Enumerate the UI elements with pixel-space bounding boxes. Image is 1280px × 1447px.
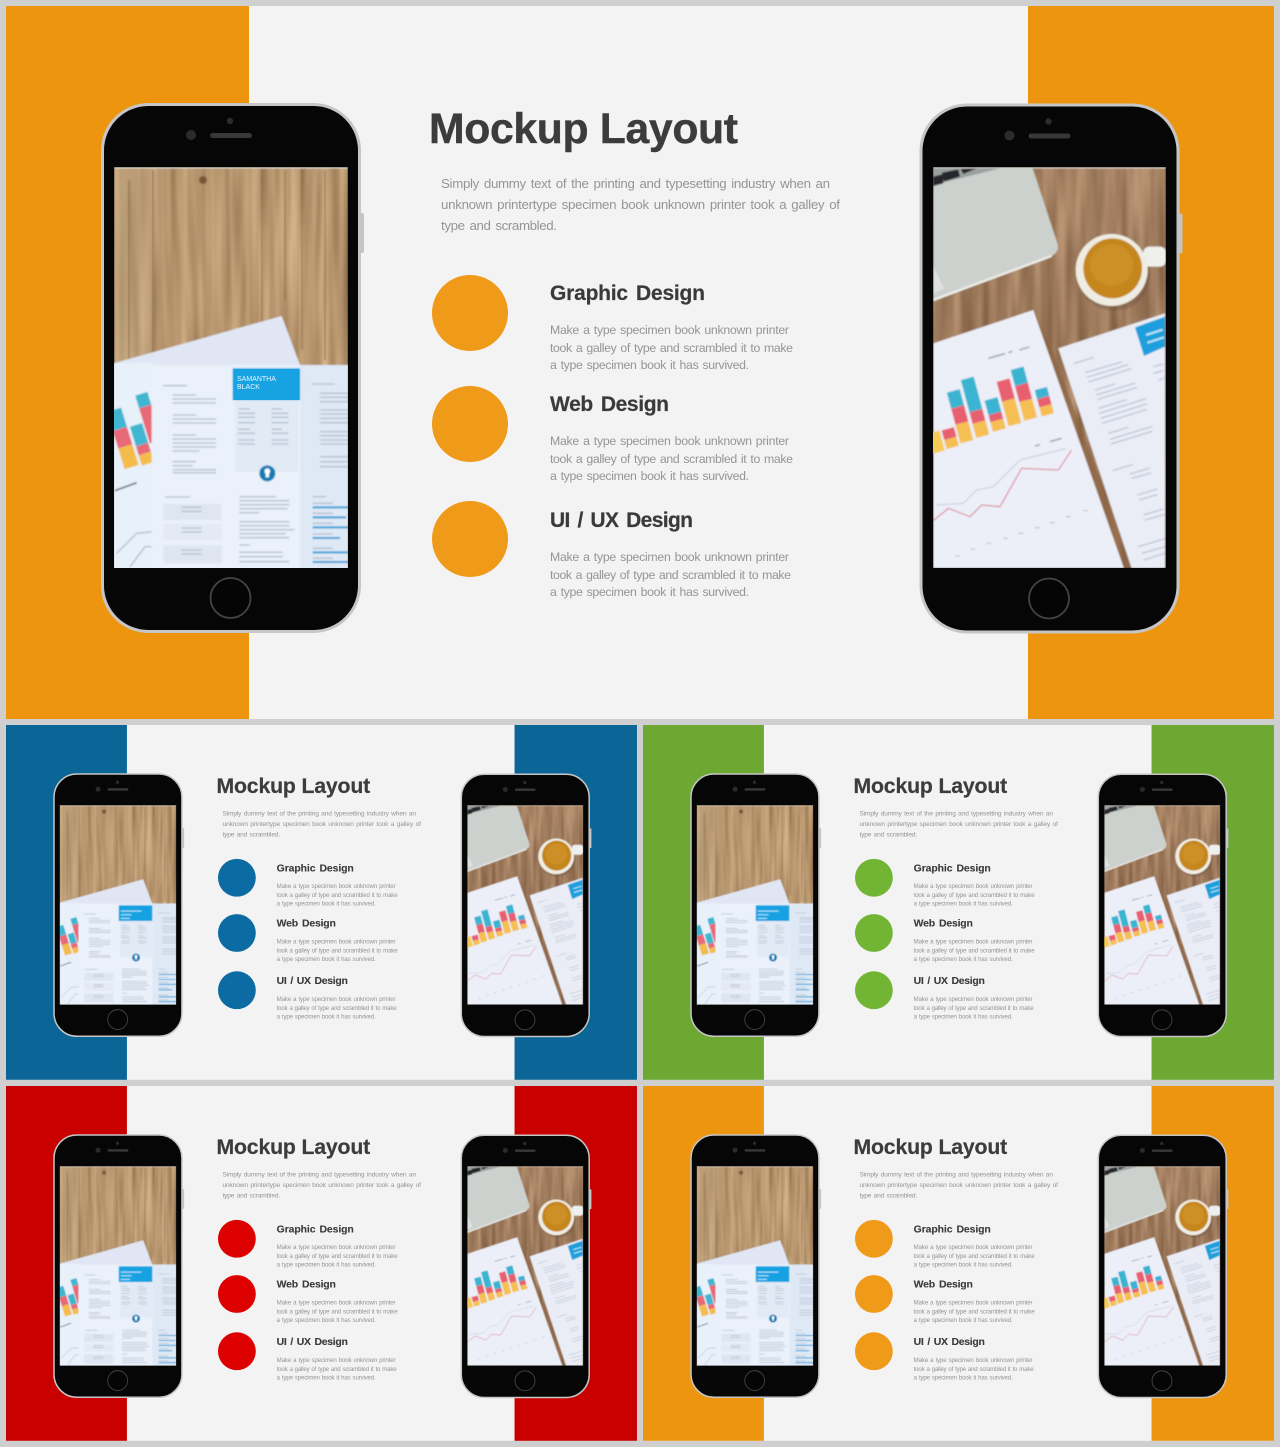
title: Mockup Layout — [216, 1135, 370, 1159]
intro paragraph — [859, 811, 1058, 838]
item: Web Design — [277, 919, 398, 963]
item: UI / UX Design: took a galley of type and scrambled it to make — [550, 568, 791, 582]
item: UI / UX Design: Make a type specimen book unknown printer — [914, 996, 1033, 1003]
icon: circle 2 — [855, 1275, 893, 1313]
item: Web Design: took a galley of type and scrambled it to make — [277, 1308, 398, 1315]
item: UI / UX Design — [277, 976, 397, 1021]
item: UI / UX Design: a type specimen book it has survived. — [914, 1014, 1013, 1021]
item: Graphic Design: a type specimen book it has survived. — [277, 901, 376, 908]
item: Graphic Design: Graphic Design — [277, 1224, 354, 1235]
intro paragraph: unknown printertype specimen book unknown printer took a galley of — [222, 1182, 421, 1189]
right phone mockup — [461, 1135, 591, 1397]
left phone mockup: SAMANTHA — [237, 376, 276, 383]
title: Mockup Layout — [429, 105, 738, 153]
item: Web Design: took a galley of type and scrambled it to make — [914, 947, 1035, 954]
intro paragraph: type and scrambled. — [859, 1192, 917, 1199]
item: Web Design: a type specimen book it has survived. — [277, 956, 376, 963]
intro paragraph: unknown printertype specimen book unknown printer took a galley of — [441, 197, 840, 212]
right colour band — [1028, 6, 1274, 719]
panel: small slide, green — [643, 725, 1274, 1080]
intro paragraph: Simply dummy text of the printing and typesetting industry when an — [859, 1172, 1053, 1179]
item: Graphic Design: Make a type specimen book unknown printer — [914, 1244, 1033, 1251]
left colour band — [6, 725, 127, 1080]
item: Graphic Design: Make a type specimen book unknown printer — [277, 1244, 396, 1251]
icon: circle 1 — [855, 859, 893, 897]
item: Web Design: Make a type specimen book unknown printer — [914, 1299, 1033, 1306]
item: UI / UX Design: Make a type specimen book unknown printer — [550, 550, 789, 564]
icon: circle 1 — [855, 1220, 893, 1258]
intro paragraph: unknown printertype specimen book unknown printer took a galley of — [222, 821, 421, 828]
right colour band — [1152, 725, 1274, 1080]
item: Web Design: Make a type specimen book unknown printer — [277, 938, 396, 945]
item: Graphic Design: Make a type specimen book unknown printer — [277, 883, 396, 890]
icon: circle 1 — [218, 1220, 256, 1258]
item: UI / UX Design: UI / UX Design — [277, 976, 348, 987]
left phone mockup — [54, 774, 184, 1036]
item: UI / UX Design: a type specimen book it has survived. — [277, 1375, 376, 1382]
item: Web Design: Web Design — [550, 393, 669, 416]
item: Web Design: Make a type specimen book unknown printer — [914, 938, 1033, 945]
item: Web Design: took a galley of type and scrambled it to make — [550, 452, 793, 466]
item: UI / UX Design: Make a type specimen book unknown printer — [277, 996, 396, 1003]
item: Graphic Design — [277, 1224, 398, 1269]
intro paragraph: Simply dummy text of the printing and typesetting industry when an — [859, 811, 1053, 818]
item: Graphic Design: took a galley of type and scrambled it to make — [277, 1253, 398, 1260]
intro paragraph: type and scrambled. — [222, 831, 280, 838]
item: UI / UX Design: took a galley of type and scrambled it to make — [914, 1366, 1034, 1373]
icon: circle 2 — [855, 914, 893, 952]
intro paragraph — [859, 1172, 1058, 1199]
title: Mockup Layout — [853, 1135, 1007, 1159]
item: UI / UX Design: UI / UX Design — [277, 1337, 348, 1348]
item: Web Design — [277, 1280, 398, 1324]
intro paragraph — [222, 811, 421, 838]
item: Graphic Design — [277, 863, 398, 908]
panel: small slide, orange — [643, 1086, 1274, 1441]
item: Web Design: Web Design — [914, 1280, 973, 1291]
item: Graphic Design: a type specimen book it has survived. — [914, 1262, 1013, 1269]
item: UI / UX Design: a type specimen book it has survived. — [914, 1375, 1013, 1382]
intro paragraph: type and scrambled. — [222, 1192, 280, 1199]
item: Web Design: a type specimen book it has survived. — [550, 469, 749, 483]
item: Graphic Design: a type specimen book it has survived. — [550, 358, 749, 372]
item: UI / UX Design: took a galley of type and scrambled it to make — [277, 1005, 397, 1012]
intro paragraph: Simply dummy text of the printing and typesetting industry when an — [222, 1172, 416, 1179]
left colour band — [6, 1086, 127, 1441]
slide background — [643, 725, 1274, 1080]
item: Graphic Design — [550, 282, 793, 372]
icon: circle 3 — [855, 1332, 893, 1370]
item: UI / UX Design: UI / UX Design — [914, 1337, 985, 1348]
item: Graphic Design: Make a type specimen book unknown printer — [914, 883, 1033, 890]
item: Web Design: Web Design — [277, 919, 336, 930]
icon: circle 3 — [218, 1332, 256, 1370]
right phone mockup — [1098, 774, 1228, 1036]
left colour band — [6, 6, 249, 719]
intro paragraph: type and scrambled. — [859, 831, 917, 838]
item: Graphic Design: a type specimen book it has survived. — [277, 1262, 376, 1269]
intro paragraph: Simply dummy text of the printing and typesetting industry when an — [441, 176, 830, 191]
icon: circle 1 — [432, 275, 508, 351]
left phone mockup: BLACK — [237, 384, 260, 391]
item: Graphic Design: took a galley of type and scrambled it to make — [914, 1253, 1035, 1260]
item: Web Design: Make a type specimen book unknown printer — [277, 1299, 396, 1306]
item: UI / UX Design — [277, 1337, 397, 1382]
right phone mockup — [921, 105, 1182, 632]
left phone mockup — [691, 1135, 821, 1397]
item: UI / UX Design: took a galley of type and scrambled it to make — [277, 1366, 397, 1373]
item: UI / UX Design: a type specimen book it has survived. — [550, 585, 749, 599]
slide background — [643, 1086, 1274, 1441]
item: Graphic Design: took a galley of type and scrambled it to make — [550, 341, 793, 355]
left phone mockup — [54, 1135, 184, 1397]
item: Graphic Design: Graphic Design — [914, 1224, 991, 1235]
item: UI / UX Design: UI / UX Design — [914, 976, 985, 987]
item: UI / UX Design: UI / UX Design — [550, 509, 693, 532]
icon: circle 2 — [218, 914, 256, 952]
title: Mockup Layout — [853, 774, 1007, 798]
item: Web Design: took a galley of type and scrambled it to make — [277, 947, 398, 954]
item: Web Design: a type specimen book it has survived. — [914, 956, 1013, 963]
intro paragraph — [441, 176, 840, 233]
item: Web Design: Make a type specimen book unknown printer — [550, 434, 789, 448]
left phone mockup — [102, 104, 364, 632]
intro paragraph: type and scrambled. — [441, 218, 557, 233]
item: Web Design: Web Design — [277, 1280, 336, 1291]
item: UI / UX Design: Make a type specimen book unknown printer — [277, 1357, 396, 1364]
icon: circle 3 — [855, 971, 893, 1009]
item: Web Design: Web Design — [914, 919, 973, 930]
panel: main slide, orange — [6, 6, 1274, 719]
intro paragraph: unknown printertype specimen book unknown printer took a galley of — [859, 1182, 1058, 1189]
left colour band — [643, 725, 764, 1080]
icon: circle 3 — [218, 971, 256, 1009]
intro paragraph: unknown printertype specimen book unknown printer took a galley of — [859, 821, 1058, 828]
intro paragraph — [222, 1172, 421, 1199]
icon: circle 2 — [432, 386, 508, 462]
item: Web Design: took a galley of type and scrambled it to make — [914, 1308, 1035, 1315]
item: Graphic Design: Graphic Design — [277, 863, 354, 874]
right phone mockup — [461, 774, 591, 1036]
item: Graphic Design: Graphic Design — [914, 863, 991, 874]
item: Graphic Design — [914, 1224, 1035, 1269]
item: Web Design: a type specimen book it has survived. — [914, 1317, 1013, 1324]
icon: circle 1 — [218, 859, 256, 897]
slide background — [6, 1086, 637, 1441]
item: Web Design — [550, 393, 793, 483]
item: Web Design: a type specimen book it has survived. — [277, 1317, 376, 1324]
left colour band — [643, 1086, 764, 1441]
panel: small slide, blue — [6, 725, 637, 1080]
item: Graphic Design: a type specimen book it has survived. — [914, 901, 1013, 908]
panel: small slide, red — [6, 1086, 637, 1441]
right colour band — [515, 725, 637, 1080]
item: UI / UX Design: a type specimen book it has survived. — [277, 1014, 376, 1021]
item: UI / UX Design: Make a type specimen book unknown printer — [914, 1357, 1033, 1364]
right colour band — [515, 1086, 637, 1441]
slide background — [6, 6, 1274, 719]
item: UI / UX Design — [914, 976, 1034, 1021]
icon: circle 3 — [432, 501, 508, 577]
item: Graphic Design — [914, 863, 1035, 908]
item: UI / UX Design — [550, 509, 791, 599]
slide background — [6, 725, 637, 1080]
item: Graphic Design: Make a type specimen book unknown printer — [550, 323, 789, 337]
item: Web Design — [914, 919, 1035, 963]
item: Graphic Design: took a galley of type and scrambled it to make — [914, 892, 1035, 899]
intro paragraph: Simply dummy text of the printing and typesetting industry when an — [222, 811, 416, 818]
item: UI / UX Design — [914, 1337, 1034, 1382]
item: UI / UX Design: took a galley of type and scrambled it to make — [914, 1005, 1034, 1012]
right colour band — [1152, 1086, 1274, 1441]
item: Graphic Design: took a galley of type and scrambled it to make — [277, 892, 398, 899]
title: Mockup Layout — [216, 774, 370, 798]
icon: circle 2 — [218, 1275, 256, 1313]
right phone mockup — [1098, 1135, 1228, 1397]
item: Web Design — [914, 1280, 1035, 1324]
item: Graphic Design: Graphic Design — [550, 282, 705, 305]
left phone mockup — [691, 774, 821, 1036]
